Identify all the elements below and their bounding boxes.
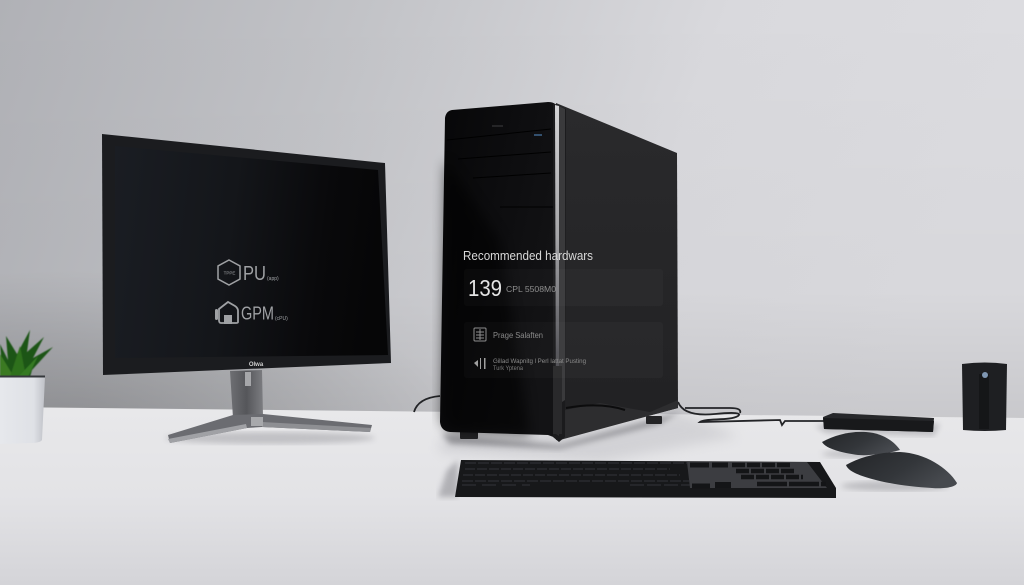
icon: house shaped GPU [215, 302, 238, 324]
page solution text: Prage Salaften [493, 331, 543, 340]
icon: hexagon chip: TPPE [224, 270, 235, 276]
keyboard key highlights [462, 463, 690, 485]
left cable [414, 396, 440, 412]
USB hub [815, 413, 940, 436]
wall background [0, 0, 1024, 420]
tower glass reflection [441, 160, 530, 435]
monitor brand label: Olwa [249, 362, 264, 368]
icon: speaker [474, 358, 486, 369]
speaker cylinder [962, 362, 1007, 431]
GPU label with icon [215, 302, 288, 324]
tower PC [440, 102, 680, 449]
tower vent [553, 366, 562, 434]
tower feet [460, 416, 662, 439]
tower chrome strip [553, 103, 566, 442]
potted plant [0, 330, 53, 444]
plant leaves [0, 330, 53, 377]
keyboard shadow [438, 460, 458, 497]
keyboard [438, 460, 836, 498]
tower side panel [556, 103, 678, 440]
detail text: Gillad Wapnitg l Perl lattat Pusting [493, 358, 586, 365]
tower front panel [440, 102, 556, 438]
plant pot [0, 377, 45, 444]
CPU label with icon [218, 260, 279, 285]
PU text: PU [243, 263, 266, 285]
monitor stand [165, 370, 375, 444]
tower power light [534, 134, 542, 136]
right cable [678, 402, 825, 425]
tower top logo [492, 125, 503, 127]
mouse front [841, 452, 957, 491]
mouse back [822, 432, 900, 458]
monitor screen [115, 146, 388, 358]
panel rows [464, 269, 663, 378]
PU small text: (app) [267, 276, 279, 282]
tower shadow [442, 412, 680, 449]
monitor [102, 134, 391, 444]
GPM small text: (cPU) [275, 316, 288, 322]
detail text second line: Turk Yptena [493, 366, 524, 372]
GPM text: GPM [241, 304, 274, 324]
panel heading: Recommended hardwars [463, 249, 593, 263]
monitor bezel [102, 134, 391, 375]
cables [414, 396, 825, 425]
big number: 139 [468, 275, 502, 301]
keyboard plate [687, 462, 827, 488]
keyboard body [455, 460, 836, 498]
tower bay lines [447, 129, 558, 207]
recommended hardware panel [463, 249, 663, 378]
number caption: CPL 5508M0 [506, 284, 556, 294]
desk surface [0, 407, 1024, 585]
icon: memory chip [474, 328, 486, 341]
keyboard keys [690, 465, 826, 486]
